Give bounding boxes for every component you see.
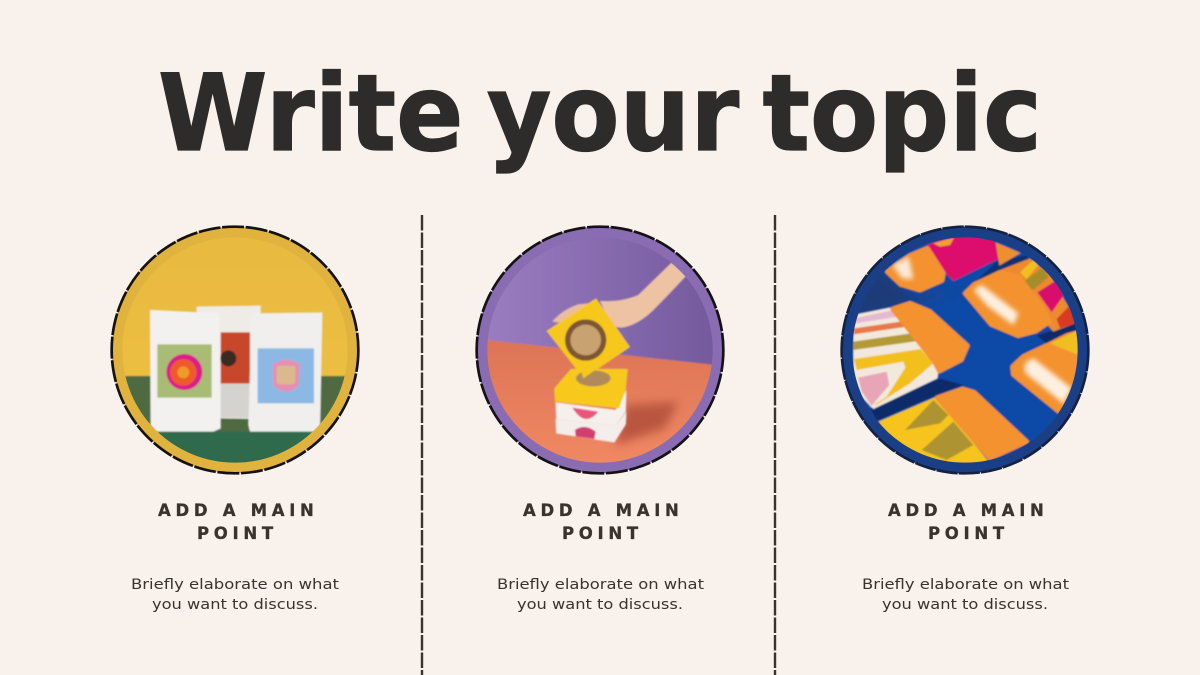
heading: third point [888,501,1049,543]
panel: second point [477,227,723,613]
divider: left [421,215,423,675]
heading: third point: ADD A MAIN [888,501,1049,520]
heading: second point: ADD A MAIN [523,501,684,520]
ring: dashed outline [112,227,358,473]
text: second description: Briefly elaborate on what [497,577,704,593]
heading: third point: POINT [928,524,1009,543]
image: coffee bags in circle [112,227,358,475]
text: first description: you want to discuss. [152,597,318,613]
heading: first point [158,501,319,543]
text: second description: you want to discuss. [517,597,683,613]
heading: first point: ADD A MAIN [158,501,319,520]
divider: right [774,215,776,675]
text: first description: Briefly elaborate on what [131,577,339,593]
panel: third point [842,227,1088,613]
ring: dashed outline [477,227,723,473]
image: cookie boxes in circle [477,227,723,475]
text: third description: you want to discuss. [882,597,1048,613]
heading: first point: POINT [197,524,278,543]
ring: dashed outline [842,227,1088,473]
text: third description: Briefly elaborate on what [862,577,1069,593]
heading: second point: POINT [562,524,643,543]
text: first description [131,577,339,613]
panel: first point [112,227,358,613]
text: second description [497,577,704,613]
title: Write your topic [158,52,1042,175]
text: third description [862,577,1069,613]
image: orange packaged trays in circle [842,227,1088,473]
heading: second point [523,501,684,543]
